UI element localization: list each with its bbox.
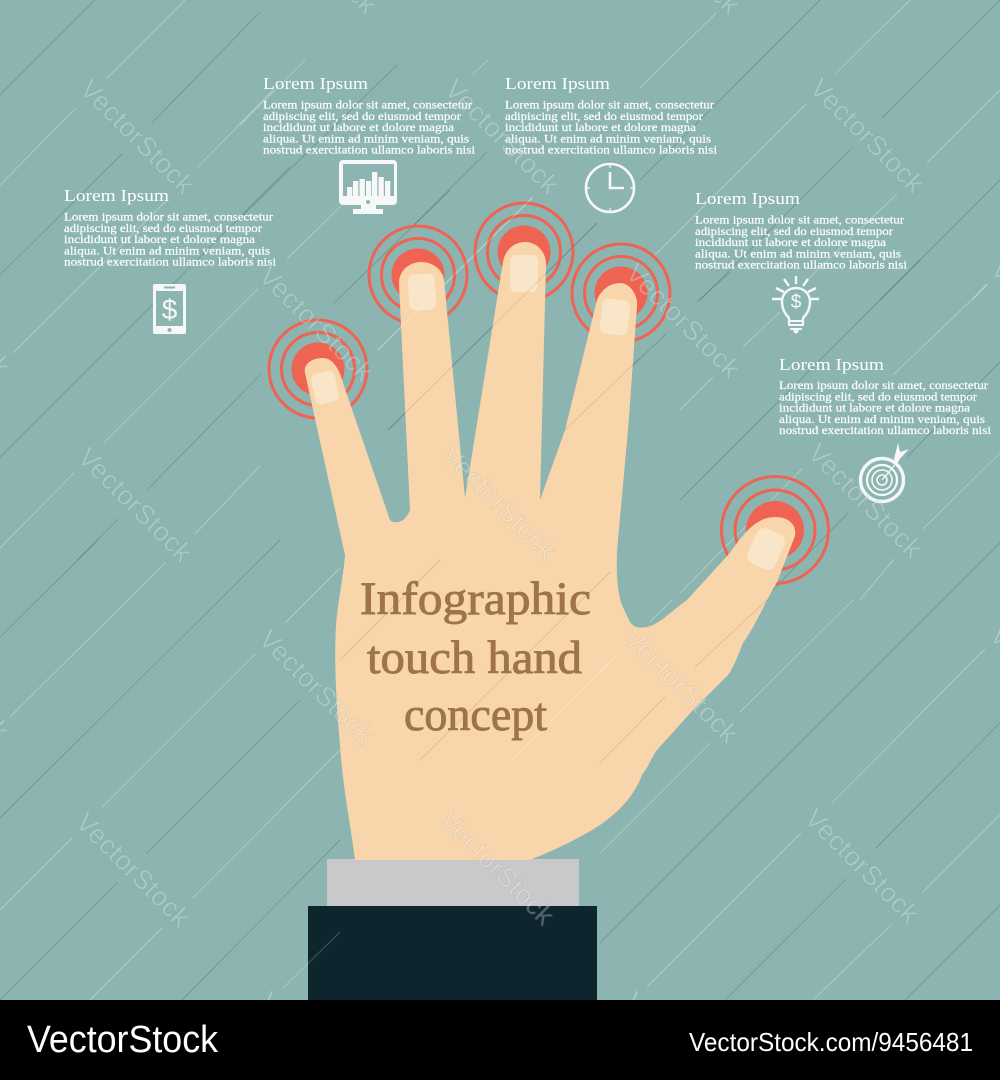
text block: upper left: Lorem ipsum dolor sit amet, consectetur: [263, 100, 472, 112]
text block: upper right: nostrud exercitation ullamco laboris nisi: [695, 260, 907, 272]
text block: right: Lorem Ipsum: [779, 355, 884, 374]
text block: upper centre: aliqua. Ut enim ad minim veniam, quis: [505, 133, 712, 145]
text block: left: [64, 186, 276, 269]
fingernail: middle finger: [510, 255, 538, 292]
text block: upper centre: Lorem Ipsum: [505, 74, 610, 93]
shirt cuff: [327, 859, 579, 906]
text block: upper left: aliqua. Ut enim ad minim veniam, quis: [263, 133, 470, 145]
text block: right: Lorem ipsum dolor sit amet, consectetur: [779, 380, 988, 392]
text block: upper right: incididunt ut labore et dolore magna: [695, 237, 886, 249]
icon: clock: [586, 164, 634, 212]
touch ripple: ring finger: [369, 226, 467, 324]
text block: upper right: [695, 189, 907, 272]
hand: [305, 242, 795, 860]
footer bar: VectorStock: [27, 1019, 219, 1061]
text block: upper left: Lorem Ipsum: [263, 74, 368, 93]
watermarks: VectorStock: [436, 440, 562, 566]
touch ripple: index finger: [572, 244, 670, 342]
watermarks: VectorStock: [799, 803, 925, 929]
title: touch hand: [367, 632, 582, 684]
streaks crossing the hand and sleeve: light: [283, 197, 620, 988]
text block: right: aliqua. Ut enim ad minim veniam, quis: [779, 414, 986, 426]
watermarks: VectorStock: [620, 258, 746, 384]
text block: right: incididunt ut labore et dolore magna: [779, 402, 970, 414]
icon: light bulb with dollar: [772, 276, 819, 334]
touch ripple: pinky: [269, 320, 367, 418]
touch ripple: thumb: [722, 476, 828, 584]
watermarks: VectorStock: [618, 623, 744, 749]
text block: upper centre: [505, 74, 717, 157]
text block: upper right: Lorem ipsum dolor sit amet, consectetur: [695, 214, 904, 226]
text block: upper left: [263, 74, 475, 157]
footer bar: [0, 1000, 1000, 1080]
watermarks: VectorStock: [74, 74, 200, 200]
text block: upper right: aliqua. Ut enim ad minim veniam, quis: [695, 248, 902, 260]
fingernail: thumb: [745, 526, 787, 572]
text block: right: nostrud exercitation ullamco laboris nisi: [779, 425, 991, 437]
fingernail: pinky: [310, 370, 340, 405]
fingernail: index finger: [599, 298, 631, 336]
text block: left: adipiscing elit, sed do eiusmod tempor: [64, 223, 262, 235]
text block: upper right: adipiscing elit, sed do eiusmod tempor: [695, 226, 893, 238]
watermarks: VectorStock: [253, 624, 379, 750]
text block: upper centre: Lorem ipsum dolor sit amet, consectetur: [505, 100, 714, 112]
fingernail: ring finger: [408, 273, 436, 311]
text block: right: adipiscing elit, sed do eiusmod tempor: [779, 391, 977, 403]
title: concept: [404, 689, 547, 741]
text block: upper centre: incididunt ut labore et dolore magna: [505, 122, 696, 134]
watermarks: VectorStock: [439, 74, 565, 200]
watermarks: VectorStock: [72, 442, 198, 568]
icon: smartphone with dollar: $: [162, 294, 178, 325]
watermarks: VectorStock: [70, 807, 196, 933]
text block: upper left: adipiscing elit, sed do eiusmod tempor: [263, 111, 461, 123]
text block: left: incididunt ut labore et dolore magna: [64, 234, 255, 246]
text block: left: nostrud exercitation ullamco laboris nisi: [64, 257, 276, 269]
jacket sleeve: [308, 906, 597, 1000]
watermarks: VectorStock: [802, 438, 928, 564]
text block: right: [779, 355, 991, 437]
title: [360, 573, 591, 741]
text block: upper centre: nostrud exercitation ullamco laboris nisi: [505, 145, 717, 157]
watermarks: VectorStock: [434, 805, 560, 931]
title: Infographic: [360, 573, 591, 625]
icon: light bulb with dollar: $: [791, 292, 802, 313]
watermarks: VectorStock: [253, 261, 379, 387]
icon: target with arrow: [860, 443, 909, 502]
icon: monitor with bar chart: [339, 160, 397, 214]
text block: upper left: nostrud exercitation ullamco laboris nisi: [263, 145, 475, 157]
text block: upper centre: adipiscing elit, sed do eiusmod tempor: [505, 111, 703, 123]
footer bar: VectorStock.com/9456481: [689, 1027, 973, 1057]
text block: left: aliqua. Ut enim ad minim veniam, quis: [64, 245, 271, 257]
touch ripple: middle finger: [475, 203, 573, 301]
watermarks: VectorStock: [804, 73, 930, 199]
icon: smartphone with dollar: [153, 284, 186, 334]
text block: upper left: incididunt ut labore et dolore magna: [263, 122, 454, 134]
text block: upper right: Lorem Ipsum: [695, 189, 800, 208]
text block: left: Lorem ipsum dolor sit amet, consectetur: [64, 212, 273, 224]
streaks crossing the hand: dark: [340, 223, 767, 763]
text block: left: Lorem Ipsum: [64, 186, 169, 205]
